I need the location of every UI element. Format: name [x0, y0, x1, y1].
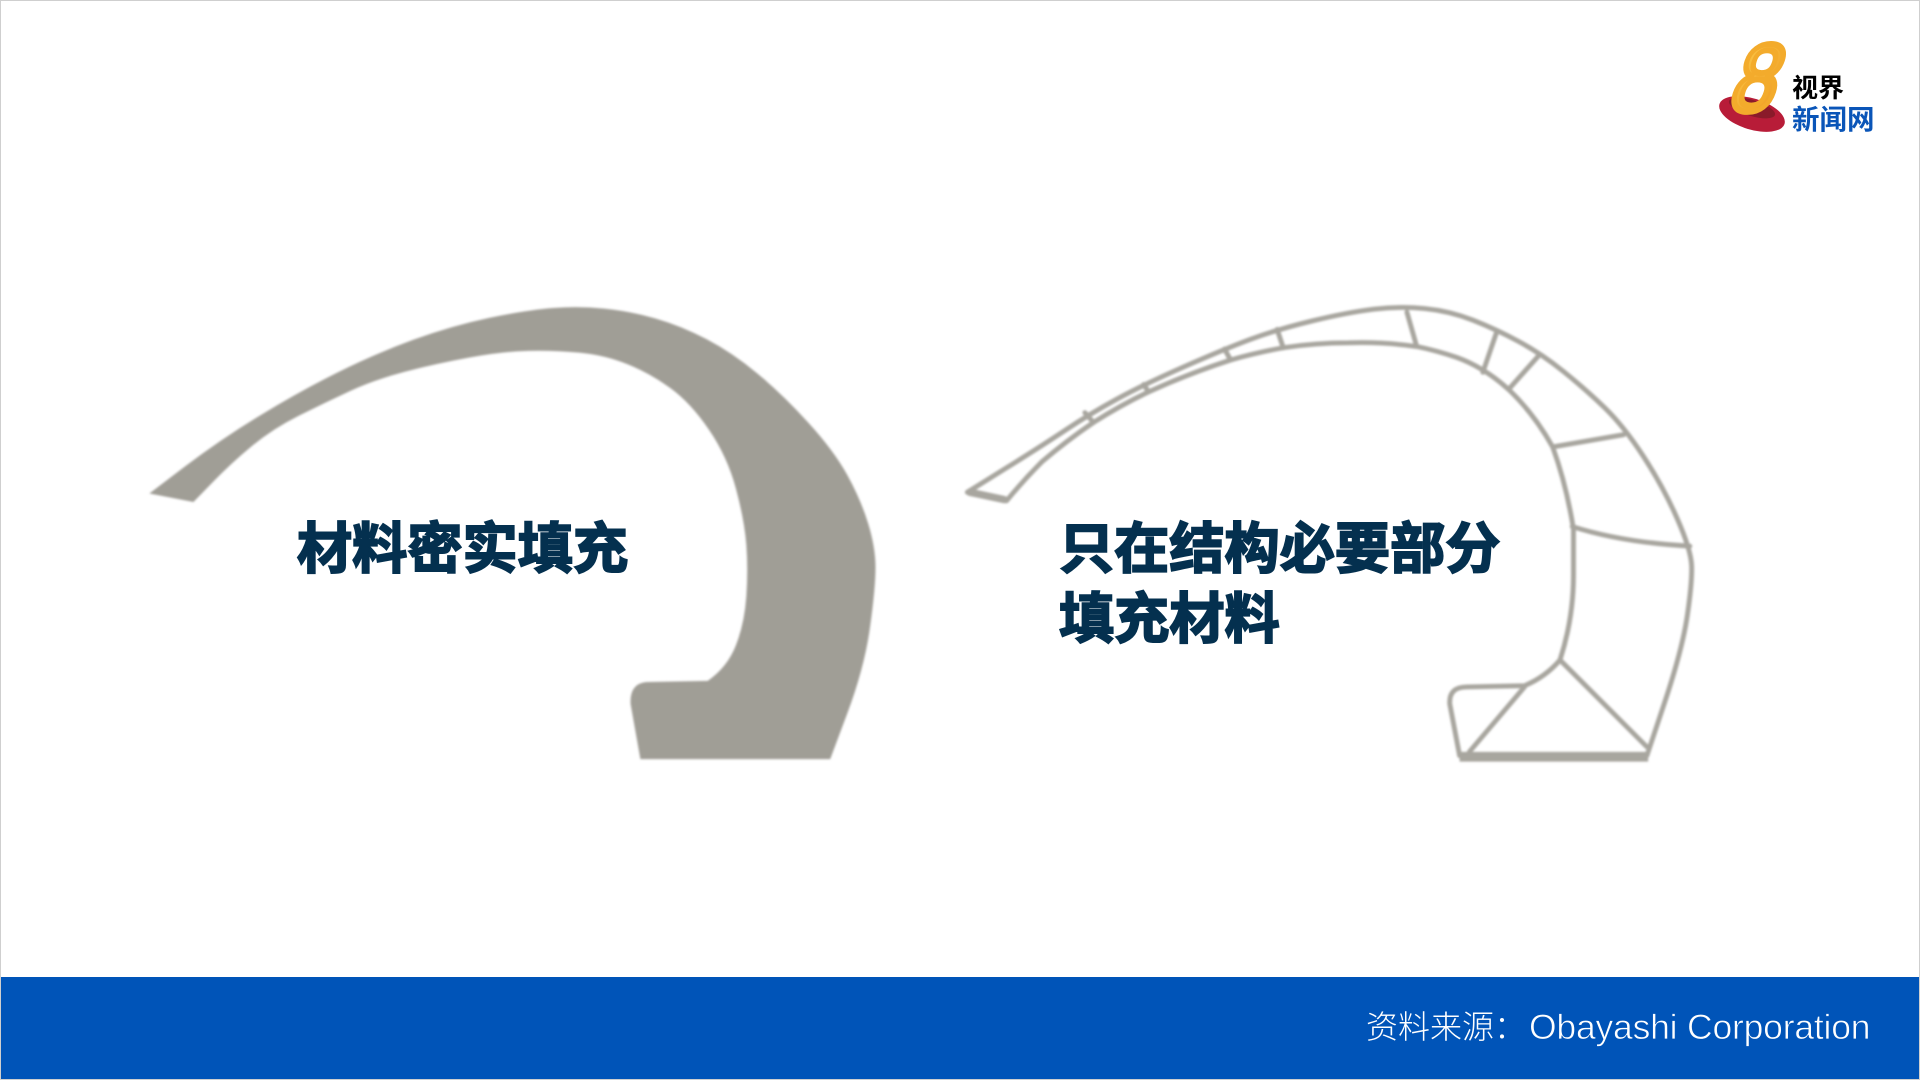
source credit: 资料来源： [1366, 1009, 1526, 1045]
heading: structural fill: 填充材料 [1059, 574, 1280, 654]
text: Obayashi Corporation [1529, 1007, 1870, 1047]
footer bar [1, 977, 1919, 1079]
heading: structural fill: 只在结构必要部分 [1059, 504, 1500, 584]
icon: golden numeral 8: 8 [1719, 25, 1799, 132]
logo text: 视界: 视界 [1792, 68, 1844, 105]
logo text: 新闻网: 新闻网 [1792, 97, 1874, 137]
heading: structural fill [1059, 504, 1500, 654]
source credit [1366, 1007, 1870, 1047]
heading: dense fill: 材料密实填充 [297, 504, 628, 584]
icon: red ellipse base [1715, 89, 1789, 139]
